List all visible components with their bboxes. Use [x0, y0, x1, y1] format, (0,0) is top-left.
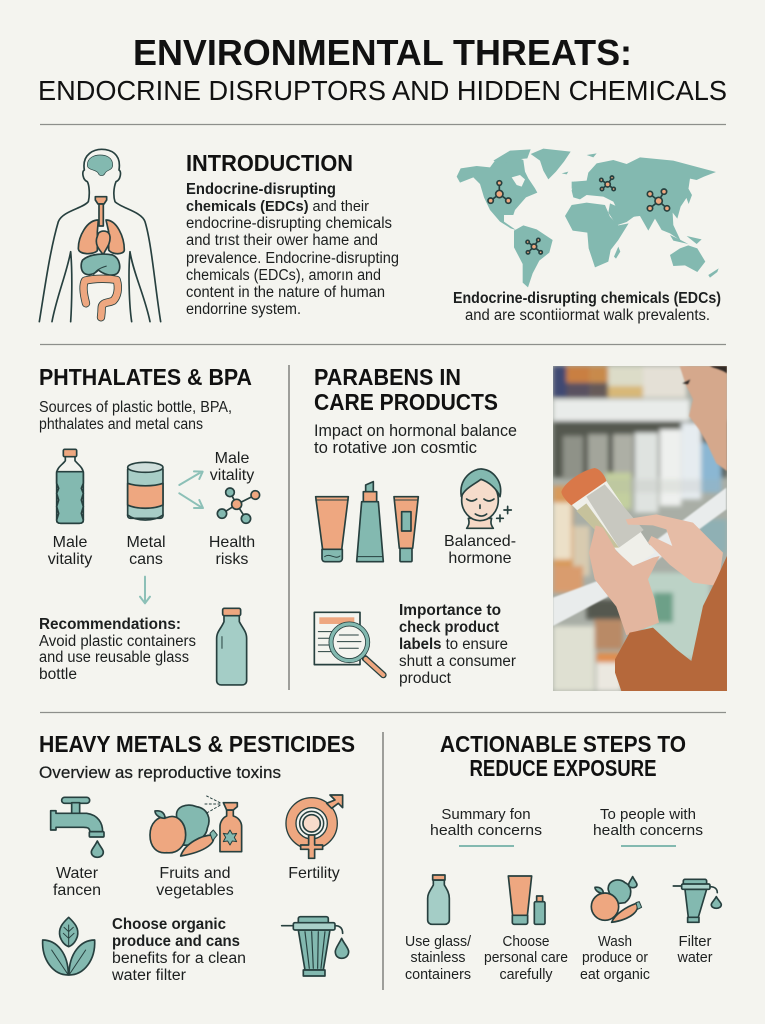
icon: plastic bottle — [57, 449, 83, 523]
panel: actionable steps — [405, 731, 721, 983]
text block: introduction body: prevalence. Endocrine-disrupting — [186, 250, 399, 267]
colon — [84, 279, 118, 317]
label: balanced hormone: hormone — [448, 550, 512, 567]
text block: check labels: Importance to — [399, 602, 501, 619]
panel: heavy metals and pesticides — [39, 731, 355, 984]
label: health risks: risks — [216, 551, 248, 568]
left hand and forearm — [589, 525, 660, 635]
heading — [440, 731, 686, 781]
icon: molecule europe — [600, 176, 615, 191]
label: wash produce: produce or — [582, 949, 648, 966]
text block: choose organic: produce and cans — [112, 933, 240, 950]
label: balanced hormone: Balanced- — [444, 533, 516, 550]
label: male vitality top: vitality — [210, 467, 254, 484]
heading: PARABENS IN — [314, 364, 461, 390]
label: use glass — [405, 933, 472, 983]
label: male vitality: vitality — [48, 551, 92, 568]
text block: impact — [314, 422, 517, 457]
label: filter water — [677, 933, 712, 966]
arrow: down — [140, 577, 150, 603]
text block: introduction body: endorrine system. — [186, 301, 301, 318]
label: balanced hormone — [444, 533, 516, 567]
label: water fancen — [53, 865, 101, 899]
icon: leaves — [43, 917, 95, 975]
label: male vitality top: Male — [215, 450, 249, 467]
label: filter water: Filter — [678, 933, 712, 950]
text block: check labels: labels to ensure — [399, 636, 508, 653]
map caption — [453, 290, 721, 324]
icon: fruits, vegetables and spray — [150, 796, 242, 856]
text block: check labels: product — [399, 670, 452, 687]
label: water fancen: Water — [56, 865, 99, 882]
heading: REDUCE EXPOSURE — [470, 755, 656, 781]
label: choose personal care — [484, 933, 568, 983]
text block: choose organic: Choose organic — [112, 916, 226, 933]
text block: sources — [39, 399, 232, 433]
icon: human body with organs — [39, 149, 161, 322]
text block: introduction body: chemicals (EDCs) and their — [186, 198, 369, 215]
text block: recommendations: bottle — [39, 666, 77, 683]
text block: introduction body: endocrine-disrupting chemicals — [186, 215, 392, 232]
heading — [314, 364, 498, 415]
shelf — [553, 488, 726, 626]
subheading: summary: health concerns — [430, 822, 542, 839]
label: use glass: Use glass/ — [405, 933, 472, 950]
subheading: to people: health concerns — [593, 822, 703, 839]
text block: introduction body: chemicals (EDCs), amorın and — [186, 267, 381, 284]
title: ENDOCRINE DISRUPTORS AND HIDDEN CHEMICALS — [38, 75, 727, 106]
label: water fancen: fancen — [53, 882, 101, 899]
label: male vitality: Male — [53, 534, 87, 551]
label: fruits and vegetables: vegetables — [156, 882, 234, 899]
label: fruits and vegetables — [156, 865, 234, 899]
heading: HEAVY METALS & PESTICIDES — [39, 731, 355, 757]
icon: personal care — [508, 876, 545, 924]
arrows: can to effects — [179, 471, 203, 508]
icon: water filter — [282, 917, 349, 976]
label: choose personal care: personal care — [484, 949, 568, 966]
text block: recommendations: Recommendations: — [39, 616, 181, 633]
text block: recommendations: and use reusable glass — [39, 649, 189, 666]
person's face — [680, 366, 727, 471]
icon: teal pump tube — [357, 482, 383, 562]
right hand — [626, 514, 723, 586]
title: ENVIRONMENTAL THREATS: — [133, 32, 632, 73]
icons: sources diagram — [57, 449, 260, 685]
icon: metal can — [128, 462, 163, 520]
label: wash produce — [580, 933, 650, 983]
icons: metals and pesticides — [43, 795, 349, 976]
icons: steps — [428, 875, 721, 924]
label: use glass: containers — [405, 966, 471, 983]
text block: recommendations: Avoid plastic containers — [39, 633, 196, 650]
label: wash produce: Wash — [598, 933, 632, 950]
icon: molecule north america — [488, 181, 511, 203]
sleeve — [615, 556, 727, 691]
text block: introduction body: content in the nature of human — [186, 284, 385, 301]
text block: sources: Sources of plastic bottle, BPA, — [39, 399, 232, 416]
icon: water tap — [51, 797, 104, 857]
label: choose personal care: carefully — [500, 966, 553, 983]
icon: molecule asia — [647, 189, 670, 211]
text block: choose organic — [111, 916, 246, 984]
label: use glass: stainless — [410, 949, 466, 966]
subheading: summary — [430, 806, 542, 839]
heading: CARE PRODUCTS — [314, 389, 498, 415]
text block: impact: Impact on hormonal balance — [314, 422, 517, 440]
text block: introduction body: Endocrine-disrupting — [186, 181, 336, 198]
text block: impact: to rotative ɹon cosmtic — [314, 439, 477, 457]
subheading: to people — [593, 806, 703, 839]
label: male vitality top — [210, 450, 254, 484]
text block: choose organic: water filter — [111, 967, 186, 984]
icon: small tube — [394, 497, 418, 562]
panel: introduction — [39, 149, 721, 324]
icon: molecule — [217, 488, 260, 523]
bottle held — [562, 468, 650, 562]
text block: choose organic: benefits for a clean — [112, 950, 246, 967]
icon: fertility symbol — [291, 795, 343, 858]
label: metal cans: Metal — [126, 534, 166, 551]
text block: introduction body — [186, 181, 399, 318]
icon: glass bottle — [428, 875, 449, 924]
subheading: Overview as reproductive toxins — [39, 764, 281, 782]
panel: phthalates and BPA — [39, 364, 260, 685]
label: wash produce: eat organic — [580, 966, 650, 983]
label: choose personal care: Choose — [502, 933, 550, 950]
icon: filter water — [673, 879, 721, 922]
label: fertility: Fertility — [288, 865, 340, 882]
heading: PHTHALATES & BPA — [39, 364, 252, 390]
text block: recommendations — [39, 616, 196, 683]
chart: world map with molecules — [457, 149, 719, 287]
map caption: Endocrine-disrupting chemicals (EDCs) — [453, 290, 721, 307]
text block: sources: phthalates and metal cans — [39, 416, 203, 433]
panel: parabens in care products — [314, 364, 517, 687]
label: metal cans: cans — [129, 551, 163, 568]
heading: ACTIONABLE STEPS TO — [440, 731, 686, 757]
label: metal cans — [126, 534, 166, 568]
icon: document with magnifier — [314, 612, 383, 675]
heading: introduction: INTRODUCTION — [186, 150, 353, 176]
map caption: and are scontiiormat walk prevalents. — [465, 307, 710, 324]
text block: check labels: check product — [399, 619, 499, 636]
icon: face — [461, 469, 511, 528]
subheading: to people: To people with — [600, 806, 696, 823]
label: fruits and vegetables: Fruits and — [159, 865, 231, 882]
text block: introduction body: and trıst their ower hame and — [186, 232, 378, 249]
icon: molecule south america — [526, 238, 542, 254]
icon: glass bottle — [217, 608, 247, 685]
title — [38, 32, 727, 106]
label: filter water: water — [677, 949, 712, 966]
label: male vitality — [48, 534, 92, 568]
icon: washed produce — [591, 877, 642, 922]
icons: care products — [314, 469, 511, 675]
label: health risks — [209, 534, 255, 568]
text block: check labels: shutt a consumer — [399, 653, 516, 670]
icon: orange tube — [316, 497, 348, 562]
subheading: summary: Summary fon — [441, 806, 531, 823]
text block: check labels — [399, 602, 516, 687]
label: health risks: Health — [209, 534, 255, 551]
photo: person reading product label — [553, 366, 727, 691]
